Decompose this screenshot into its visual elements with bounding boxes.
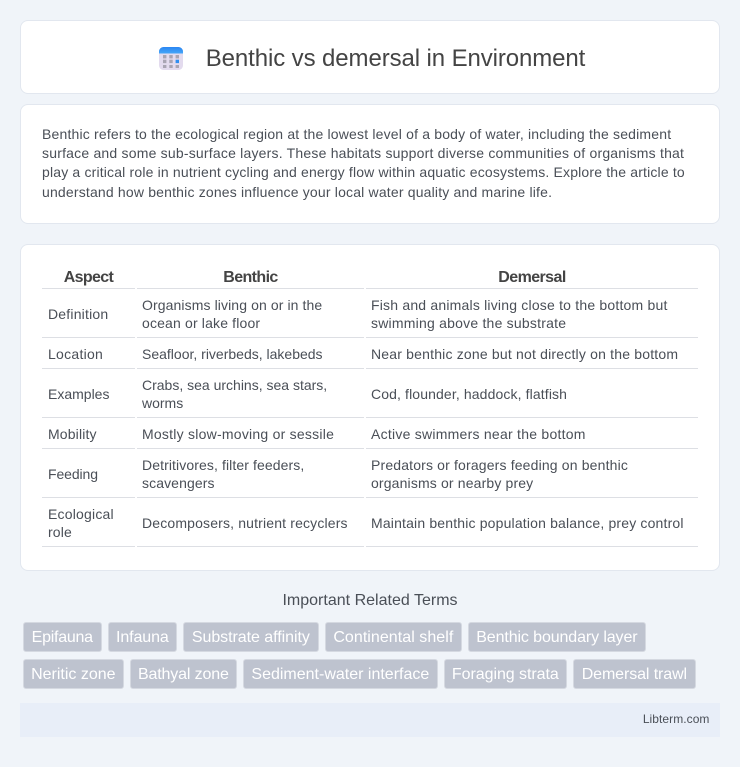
row: Definition: Organisms living on or in the [142,297,322,313]
row: Location: Seafloor, riverbeds, lakebeds [142,346,323,362]
icon: calendar [159,47,183,70]
tag: Demersal trawl [582,666,687,683]
row: Definition: Definition [48,306,108,322]
row: Feeding: scavengers [142,475,215,491]
row: Definition: ocean or lake floor [142,315,260,331]
row: Definition [48,297,668,331]
row: Location: Near benthic zone but not directly on the bottom [371,346,678,362]
column header: Benthic: Benthic [223,269,278,286]
column header: Demersal: Demersal [498,269,566,286]
panel: introduction [20,104,720,224]
tag: Bathyal zone [138,666,229,683]
row: Location [48,346,678,362]
tag [130,659,237,689]
tag [468,622,646,652]
row: Mobility: Mostly slow-moving or sessile [142,426,334,442]
row: Mobility: Mobility [48,426,97,442]
footer [20,703,720,737]
table: benthic vs demersal [42,269,698,547]
tag [573,659,696,689]
row: Feeding [48,457,628,491]
tag [325,622,462,652]
tag [23,659,124,689]
text block: introduction: understand how benthic zones influence your local water quality and marine life. [42,184,552,200]
row: Ecological role: Decomposers, nutrient recyclers [142,515,348,531]
row: Definition: swimming above the substrate [371,315,566,331]
row: Ecological role: Ecological [48,506,114,522]
tag [243,659,438,689]
tag: Continental shelf [333,629,453,646]
tag: Infauna [116,629,169,646]
row: Mobility [48,426,586,442]
tag: Sediment-water interface [251,666,429,683]
text block: introduction [42,126,685,200]
tag [108,622,177,652]
text block: introduction: Benthic refers to the ecological region at the lowest level of a body of water, including the sediment [42,126,671,142]
row: Ecological role [48,506,684,540]
panel: header [20,20,720,94]
text block: introduction: surface and some sub-surface layers. These habitats support diverse communities of organisms that [42,145,684,161]
tag [444,659,567,689]
row: Feeding: organisms or nearby prey [371,475,533,491]
row: Mobility: Active swimmers near the bottom [371,426,586,442]
footer credit: Libterm.com [643,712,710,726]
row: Examples [48,377,567,411]
tag: Foraging strata [452,666,559,683]
panel: comparison table [20,244,720,571]
text block: introduction: play a critical role in nutrient cycling and energy flow within aquatic ecosystems. Explore the article to [42,164,685,180]
tag [183,622,319,652]
row: Location: Location [48,346,103,362]
row: Examples: Cod, flounder, haddock, flatfish [371,386,567,402]
tag: Epifauna [32,629,93,646]
heading: related terms: Important Related Terms [282,592,458,609]
column header: Aspect: Aspect [64,269,113,286]
row: Definition: Fish and animals living close to the bottom but [371,297,668,313]
row: Ecological role: role [48,524,72,540]
row: Feeding: Feeding [48,466,98,482]
tag: Substrate affinity [192,629,310,646]
row: Examples: worms [142,395,183,411]
row: Feeding: Detritivores, filter feeders, [142,457,304,473]
row: Examples: Examples [48,386,109,402]
title: Benthic vs demersal in Environment [206,45,585,72]
tag [23,622,102,652]
row: Ecological role: Maintain benthic population balance, prey control [371,515,684,531]
row: Examples: Crabs, sea urchins, sea stars, [142,377,327,393]
tag: Benthic boundary layer [476,629,637,646]
tag list: related terms [23,622,696,689]
row: Feeding: Predators or foragers feeding on benthic [371,457,628,473]
tag: Neritic zone [31,666,116,683]
